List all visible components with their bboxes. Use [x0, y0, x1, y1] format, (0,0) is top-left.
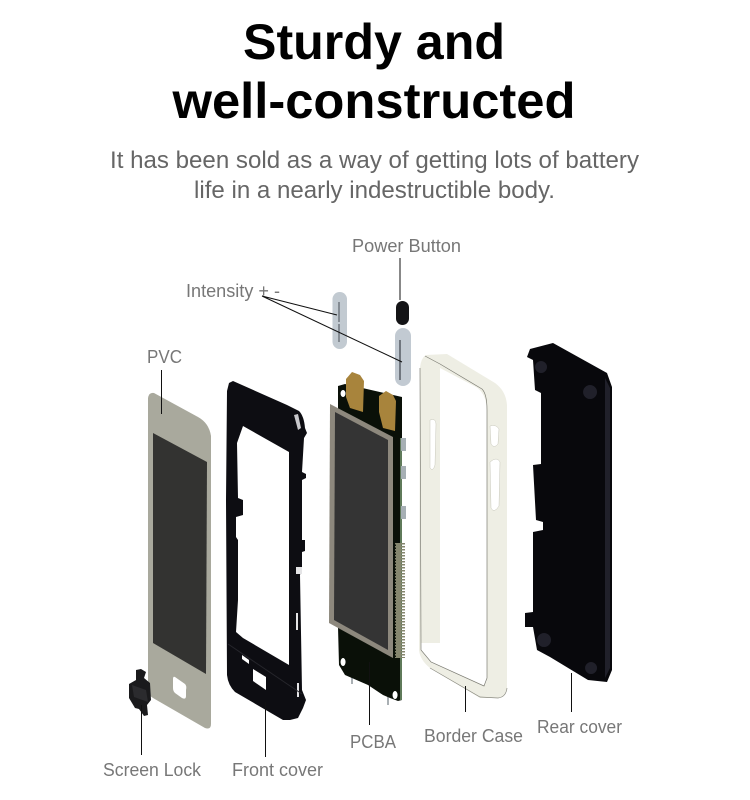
part: volume button right [395, 328, 411, 386]
subtitle: It has been sold as a way of getting lots of battery [110, 147, 639, 174]
leader lines [142, 258, 572, 757]
connector tabs [401, 438, 406, 519]
part: PCBA [329, 372, 406, 705]
label: Screen Lock: Screen Lock [103, 760, 202, 780]
label: Intensity: Intensity + - [186, 281, 280, 301]
part: power button [396, 301, 409, 325]
title: Sturdy and [243, 13, 505, 70]
part: border case [419, 354, 507, 698]
PVC screen window [153, 433, 207, 674]
label: Front cover: Front cover [232, 760, 323, 780]
part: rear cover [525, 343, 612, 682]
part: volume button left [332, 292, 347, 349]
title: well-constructed [171, 72, 576, 129]
mounting holes [341, 390, 398, 699]
edge comb [396, 543, 401, 658]
gold connectors [346, 372, 364, 412]
PCB board [338, 384, 402, 701]
part: front cover [226, 381, 307, 720]
label: Power Button: Power Button [352, 236, 461, 256]
PVC home button cutout [173, 677, 186, 699]
front cover home cutout [253, 669, 266, 690]
subtitle [110, 147, 639, 204]
part: screen lock [129, 669, 151, 716]
label: PVC: PVC [147, 347, 182, 367]
part: PVC panel [148, 393, 211, 728]
label: Rear cover: Rear cover [537, 717, 622, 737]
screws [351, 672, 389, 705]
label: PCBA: PCBA [350, 732, 396, 752]
frame slots [430, 420, 500, 511]
label: Border Case: Border Case [424, 726, 523, 746]
LCD module [329, 404, 393, 658]
subtitle: life in a nearly indestructible body. [194, 177, 555, 204]
title [171, 13, 576, 129]
rear cover bosses [535, 361, 597, 674]
